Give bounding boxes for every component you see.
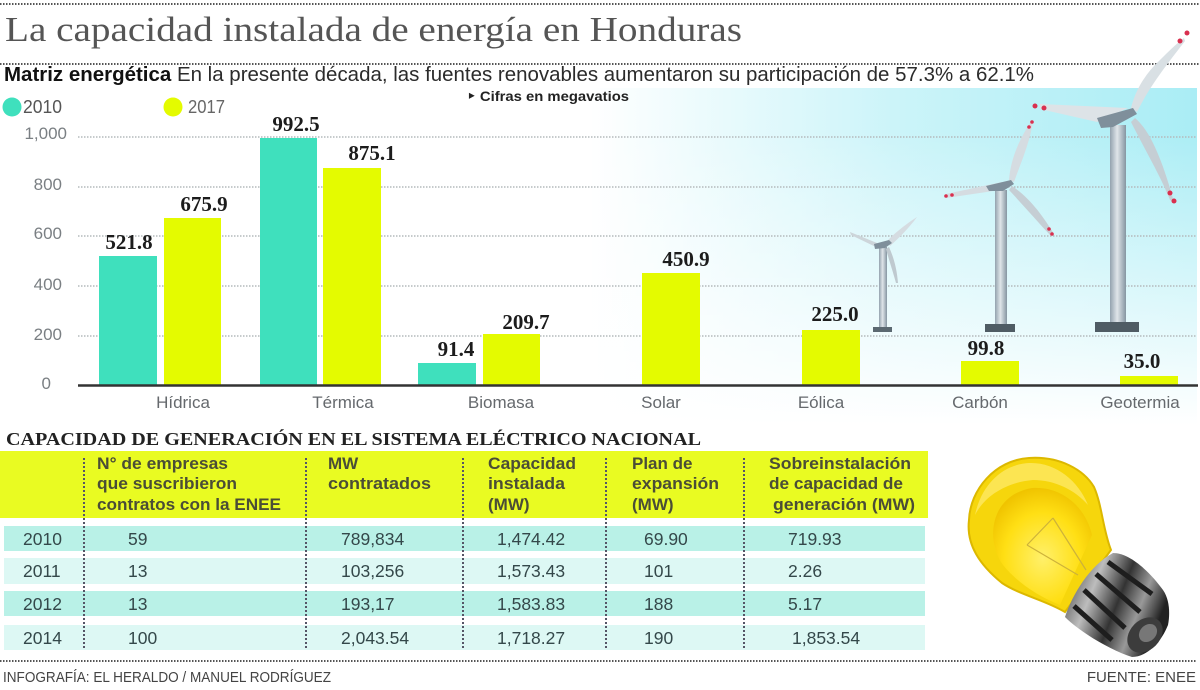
category labels: Eólica	[798, 393, 845, 412]
table rows: 101	[644, 561, 673, 581]
table heading: CAPACIDAD DE GENERACIÓN EN EL SISTEMA ELÉCTRICO NACIONAL	[6, 429, 701, 449]
bar values: 209.7	[502, 310, 550, 334]
y axis labels: 200	[34, 325, 62, 344]
table column headers: (MW)	[632, 495, 674, 514]
category labels: Térmica	[312, 393, 374, 412]
table header band	[0, 451, 928, 518]
table column headers	[97, 454, 915, 514]
table rows: 100	[128, 628, 157, 648]
table rows: 5.17	[788, 594, 822, 614]
footer source: FUENTE: ENEE	[1087, 669, 1196, 686]
table column headers: expansión	[632, 474, 719, 493]
table column headers: de capacidad de	[769, 474, 903, 493]
table rows: 188	[644, 594, 673, 614]
bar values: 99.8	[968, 336, 1004, 360]
table rows: 59	[128, 529, 147, 549]
table column headers: (MW)	[488, 495, 530, 514]
table rows: 190	[644, 628, 673, 648]
table rows: 69.90	[644, 529, 688, 549]
table rows: 2011	[23, 561, 61, 581]
table column headers: contratados	[328, 474, 431, 493]
table rows: 1,573.43	[497, 561, 565, 581]
footer rule	[0, 660, 1197, 662]
table column headers: MW	[328, 454, 359, 473]
table column headers: contratos con la ENEE	[97, 495, 281, 514]
y axis labels	[24, 124, 67, 393]
icon: small wind turbine	[850, 217, 917, 332]
table rows: 789,834	[341, 529, 405, 549]
footer credit: INFOGRAFÍA: EL HERALDO / MANUEL RODRÍGUEZ	[3, 669, 331, 686]
icon: light bulb	[969, 458, 1170, 660]
table rows: 1,853.54	[792, 628, 860, 648]
table column headers: N° de empresas	[97, 454, 228, 473]
table rows: 193,17	[341, 594, 395, 614]
table rows: 2010	[23, 529, 62, 549]
category labels: Hídrica	[156, 393, 210, 412]
bar values	[105, 112, 1160, 373]
title: La capacidad instalada de energía en Honduras	[5, 10, 742, 49]
subtitle: Matriz energética En la presente década, las fuentes renovables aumentaron su participación de 57.3% a 62.1%	[4, 63, 1034, 86]
bars	[99, 138, 1178, 385]
category labels: Solar	[641, 393, 681, 412]
y axis labels: 0	[42, 374, 51, 393]
table rows: 1,718.27	[497, 628, 565, 648]
table rows: 2014	[23, 628, 62, 648]
bar values: 450.9	[662, 247, 710, 271]
bar values: 91.4	[438, 337, 475, 361]
icon: medium wind turbine	[944, 120, 1054, 332]
bar values: 225.0	[811, 302, 859, 326]
icon: large wind turbine	[1032, 30, 1190, 332]
table rows: 2.26	[788, 561, 822, 581]
bar values: 521.8	[105, 230, 153, 254]
table rows	[23, 529, 860, 648]
table rows: 13	[128, 561, 147, 581]
table column headers: Plan de	[632, 454, 692, 473]
legend: 2010	[23, 97, 62, 117]
table column headers: Sobreinstalación	[769, 454, 911, 473]
table rows: 2012	[23, 594, 62, 614]
table rows: 719.93	[788, 529, 842, 549]
y axis labels: 600	[34, 224, 62, 243]
category labels: Carbón	[952, 393, 1008, 412]
table column headers: Capacidad	[488, 454, 576, 473]
category labels: Geotermia	[1100, 393, 1180, 412]
table rows: 13	[128, 594, 147, 614]
category labels: Biomasa	[468, 393, 535, 412]
table rows: 1,583.83	[497, 594, 565, 614]
bar values: 992.5	[272, 112, 320, 136]
y axis labels: 800	[34, 175, 62, 194]
category labels	[156, 393, 1180, 412]
table rows: 1,474.42	[497, 529, 565, 549]
bar values: 35.0	[1124, 349, 1160, 373]
table	[0, 451, 928, 650]
y axis labels: 400	[34, 275, 62, 294]
legend	[2, 97, 225, 117]
table rows: 103,256	[341, 561, 404, 581]
table column headers: que suscribieron	[97, 474, 237, 493]
bar values: 675.9	[180, 192, 228, 216]
bar values: 875.1	[348, 141, 396, 165]
y axis labels: 1,000	[24, 124, 67, 143]
note: units: ‣ Cifras en megavatios	[467, 88, 629, 104]
bar chart	[24, 112, 1198, 412]
table row bands	[4, 526, 925, 650]
table column headers: generación (MW)	[773, 495, 915, 514]
table column headers: instalada	[488, 474, 566, 493]
legend: 2017	[188, 97, 225, 117]
background: sky gradient	[590, 88, 1197, 433]
table rows: 2,043.54	[341, 628, 409, 648]
